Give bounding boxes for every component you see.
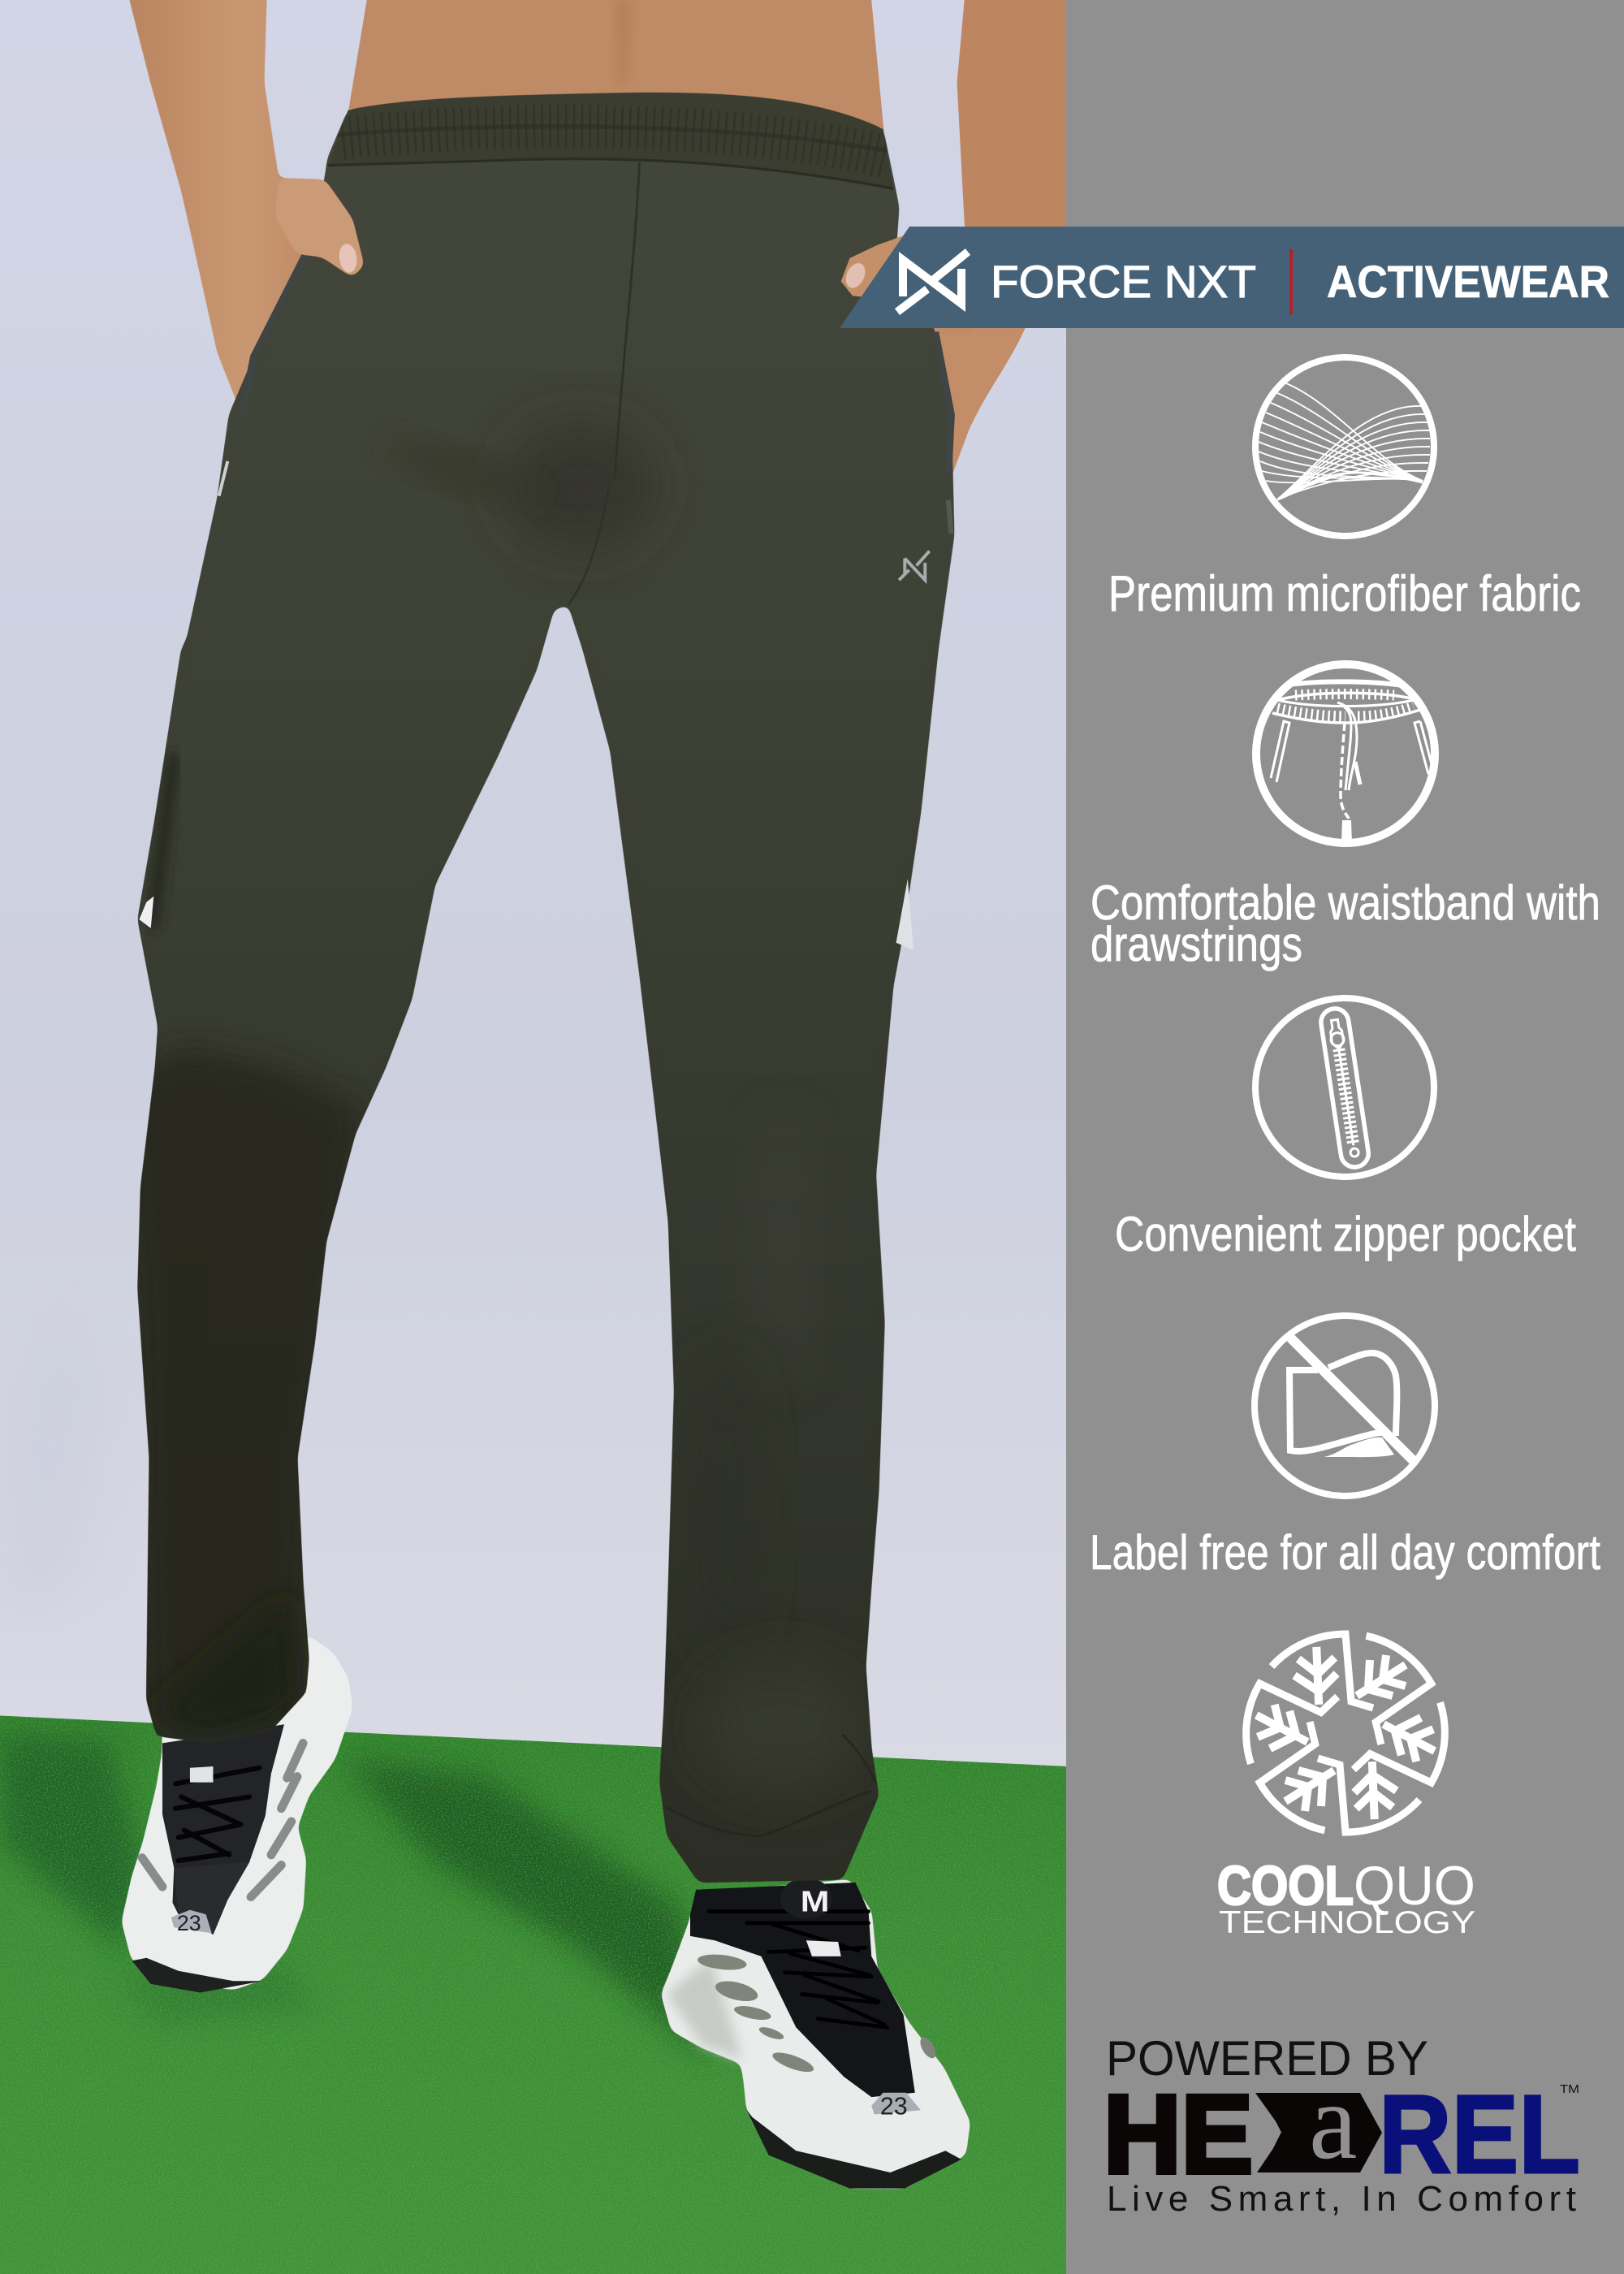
caption: comfortable waistband bbox=[1091, 875, 1600, 971]
right shoe sole bbox=[747, 2110, 961, 2189]
hexarel mark: a bbox=[1309, 2061, 1357, 2181]
center seam bbox=[615, 162, 639, 478]
hem folds bbox=[199, 1696, 875, 1831]
hexarel mark: REL bbox=[1379, 2073, 1580, 2197]
track pants bbox=[116, 93, 954, 1883]
pocket edges bbox=[242, 248, 309, 415]
pant logo bbox=[899, 551, 930, 580]
powered by hexarel logo bbox=[1104, 2031, 1580, 2219]
left shoe bbox=[122, 1636, 352, 1993]
hexarel mark bbox=[1104, 2061, 1580, 2197]
coolquo technology wordmark: QUO bbox=[1354, 1855, 1475, 1917]
icon: label free bbox=[1255, 1316, 1435, 1496]
left shoe laces bbox=[175, 1768, 260, 1861]
icon: microfiber fabric bbox=[1255, 357, 1434, 536]
right arm and hand bbox=[906, 0, 1080, 482]
left thumb nail bbox=[337, 243, 359, 274]
red divider bbox=[1289, 249, 1293, 314]
right shoe side windows bbox=[697, 1952, 939, 2076]
right thumb nail bbox=[842, 260, 869, 291]
pant shading bbox=[116, 93, 893, 1836]
reflective side panels bbox=[139, 897, 153, 928]
right shoe bbox=[661, 1878, 970, 2189]
coolquo technology wordmark: TECHNOLOGY bbox=[1219, 1905, 1475, 1940]
banner: brand ribbon bbox=[840, 227, 1624, 328]
wall background bbox=[0, 0, 1067, 1783]
caption: comfortable waistband: drawstrings bbox=[1091, 917, 1302, 971]
right fingers bbox=[841, 232, 914, 297]
waistband bbox=[328, 93, 893, 188]
right shoe laces bbox=[709, 1912, 888, 2027]
icon: Force NXT logo bbox=[897, 252, 968, 312]
icon: snowflake bbox=[1223, 1619, 1468, 1847]
hexarel mark: HE bbox=[1104, 2073, 1253, 2197]
hexarel mark: TM bbox=[1560, 2082, 1579, 2096]
coolquo technology wordmark bbox=[1217, 1855, 1475, 1940]
right shoe M badge bbox=[780, 1878, 832, 1918]
left arm and hand bbox=[126, 0, 364, 415]
icon: zipper pocket bbox=[1255, 998, 1434, 1177]
left shoe tongue tab bbox=[190, 1766, 213, 1783]
left shoe badge bbox=[171, 1910, 212, 1935]
brand name: FORCE NXT bbox=[991, 256, 1256, 307]
left shoe side windows bbox=[142, 1743, 303, 1897]
right shoe M badge: M bbox=[801, 1886, 829, 1918]
grass floor bbox=[0, 1715, 1067, 2274]
torso bbox=[345, 0, 884, 138]
left hand thumb overlay bbox=[275, 179, 364, 277]
powered by: POWERED BY bbox=[1106, 2031, 1428, 2086]
right shoe tongue tab bbox=[806, 1940, 841, 1956]
activewear label: ACTIVEWEAR bbox=[1327, 256, 1609, 307]
photo: model wearing track pants bbox=[0, 0, 1080, 2274]
wall shadow bbox=[0, 1305, 109, 1624]
icon: waistband with drawstrings bbox=[1256, 664, 1435, 843]
left shoe sole bbox=[132, 1958, 262, 1993]
coolquo technology wordmark: COOL bbox=[1217, 1855, 1354, 1917]
hexarel mark: X bbox=[1260, 2073, 1317, 2197]
left shoe badge: 23 bbox=[177, 1911, 201, 1935]
zipper pulls bbox=[219, 461, 227, 496]
right shoe number badge: 23 bbox=[880, 2094, 908, 2121]
panel: grey feature column bbox=[1066, 0, 1624, 2274]
tagline: Live Smart, In Comfort bbox=[1107, 2179, 1576, 2219]
right shoe number badge bbox=[871, 2093, 921, 2121]
